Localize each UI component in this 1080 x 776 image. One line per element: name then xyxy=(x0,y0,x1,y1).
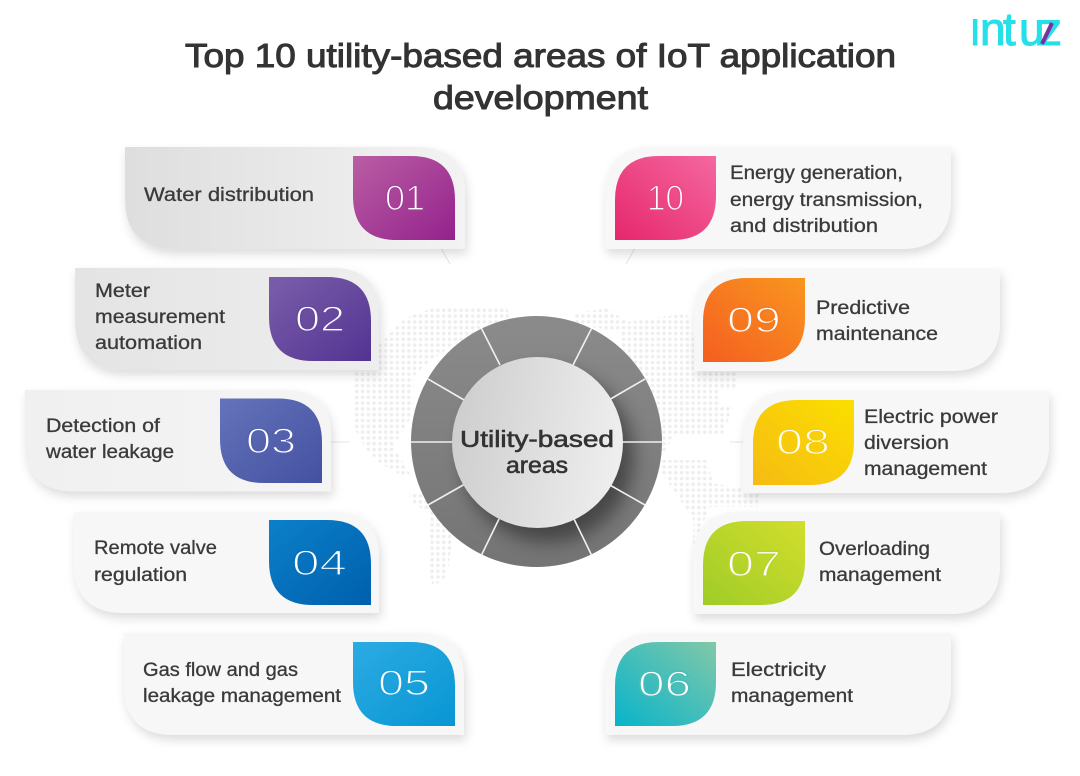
panel: 09 predictive maintenance: maintenance xyxy=(816,324,938,345)
title: Top 10 utility-based areas of IoT application xyxy=(185,37,896,74)
inner disc shadow xyxy=(462,370,634,542)
world map dots xyxy=(355,308,758,584)
outer ring xyxy=(411,316,662,567)
ring spokes xyxy=(411,328,662,555)
panel: 10 energy generation, transmission and distribution: and distribution xyxy=(730,216,878,237)
connector lines xyxy=(330,248,743,442)
panel: 05 gas flow and gas leakage management: 05 xyxy=(378,664,430,703)
panel: 02 meter measurement automation: measurement xyxy=(95,307,226,328)
panel: 08 electric power diversion management: management xyxy=(864,459,988,480)
panel: 08 electric power diversion management: Electric power xyxy=(864,407,999,428)
title xyxy=(185,37,896,116)
panel: 10 energy generation, transmission and distribution: 10 xyxy=(647,179,684,218)
centre label: areas xyxy=(506,452,568,478)
panel: 07 overloading management: 07 xyxy=(727,545,781,584)
panel: 02 meter measurement automation: automation xyxy=(95,333,202,354)
panel: 02 meter measurement automation: Meter xyxy=(95,281,151,302)
panel: 01 water distribution xyxy=(125,147,465,249)
central ring diagram xyxy=(411,316,662,567)
panel: 08 electric power diversion management: 08 xyxy=(776,423,830,462)
panel: 03 detection of water leakage: water leakage xyxy=(45,442,174,463)
panel: 04 remote valve regulation: 04 xyxy=(292,544,347,583)
centre label: Utility-based xyxy=(460,426,614,452)
panel: 10 energy generation, transmission and distribution xyxy=(605,147,951,249)
panel: 03 detection of water leakage: Detection of xyxy=(46,416,161,437)
panel: 01 water distribution: 01 xyxy=(385,179,425,218)
panel: 08 electric power diversion management xyxy=(743,391,1049,493)
panel: 09 predictive maintenance: 09 xyxy=(727,301,781,340)
panel: 05 gas flow and gas leakage management: leakage management xyxy=(143,686,342,707)
panel: 06 electricity management: Electricity xyxy=(731,660,827,681)
panel: 05 gas flow and gas leakage management xyxy=(124,633,464,735)
logo: Intuz: Intuz xyxy=(970,3,1062,55)
panel: 10 energy generation, transmission and distribution: energy transmission, xyxy=(730,190,923,211)
panel: 08 electric power diversion management: diversion xyxy=(864,433,949,454)
panel: 09 predictive maintenance: Predictive xyxy=(816,298,910,319)
panel: 07 overloading management: Overloading xyxy=(819,539,930,560)
panel: 07 overloading management xyxy=(693,512,1000,614)
panel: 03 detection of water leakage: 03 xyxy=(246,422,296,461)
centre disc xyxy=(452,357,623,528)
panel: 05 gas flow and gas leakage management: Gas flow and gas xyxy=(143,660,298,681)
panel: 02 meter measurement automation xyxy=(75,268,379,370)
panel: 03 detection of water leakage xyxy=(25,390,331,492)
panel: 04 remote valve regulation: regulation xyxy=(94,565,187,586)
panel: 02 meter measurement automation: 02 xyxy=(295,300,345,339)
panel: 04 remote valve regulation xyxy=(74,512,379,613)
centre label xyxy=(460,426,614,478)
panel: 07 overloading management: management xyxy=(819,565,942,586)
panel: 01 water distribution: Water distribution xyxy=(144,185,314,206)
panel: 09 predictive maintenance xyxy=(694,269,1000,371)
panel: 06 electricity management: 06 xyxy=(638,665,691,704)
title: development xyxy=(433,79,648,116)
panel: 06 electricity management: management xyxy=(731,686,854,707)
panel: 06 electricity management xyxy=(605,633,951,735)
panel: 10 energy generation, transmission and distribution: Energy generation, xyxy=(730,163,903,184)
panel: 04 remote valve regulation: Remote valve xyxy=(94,538,217,559)
